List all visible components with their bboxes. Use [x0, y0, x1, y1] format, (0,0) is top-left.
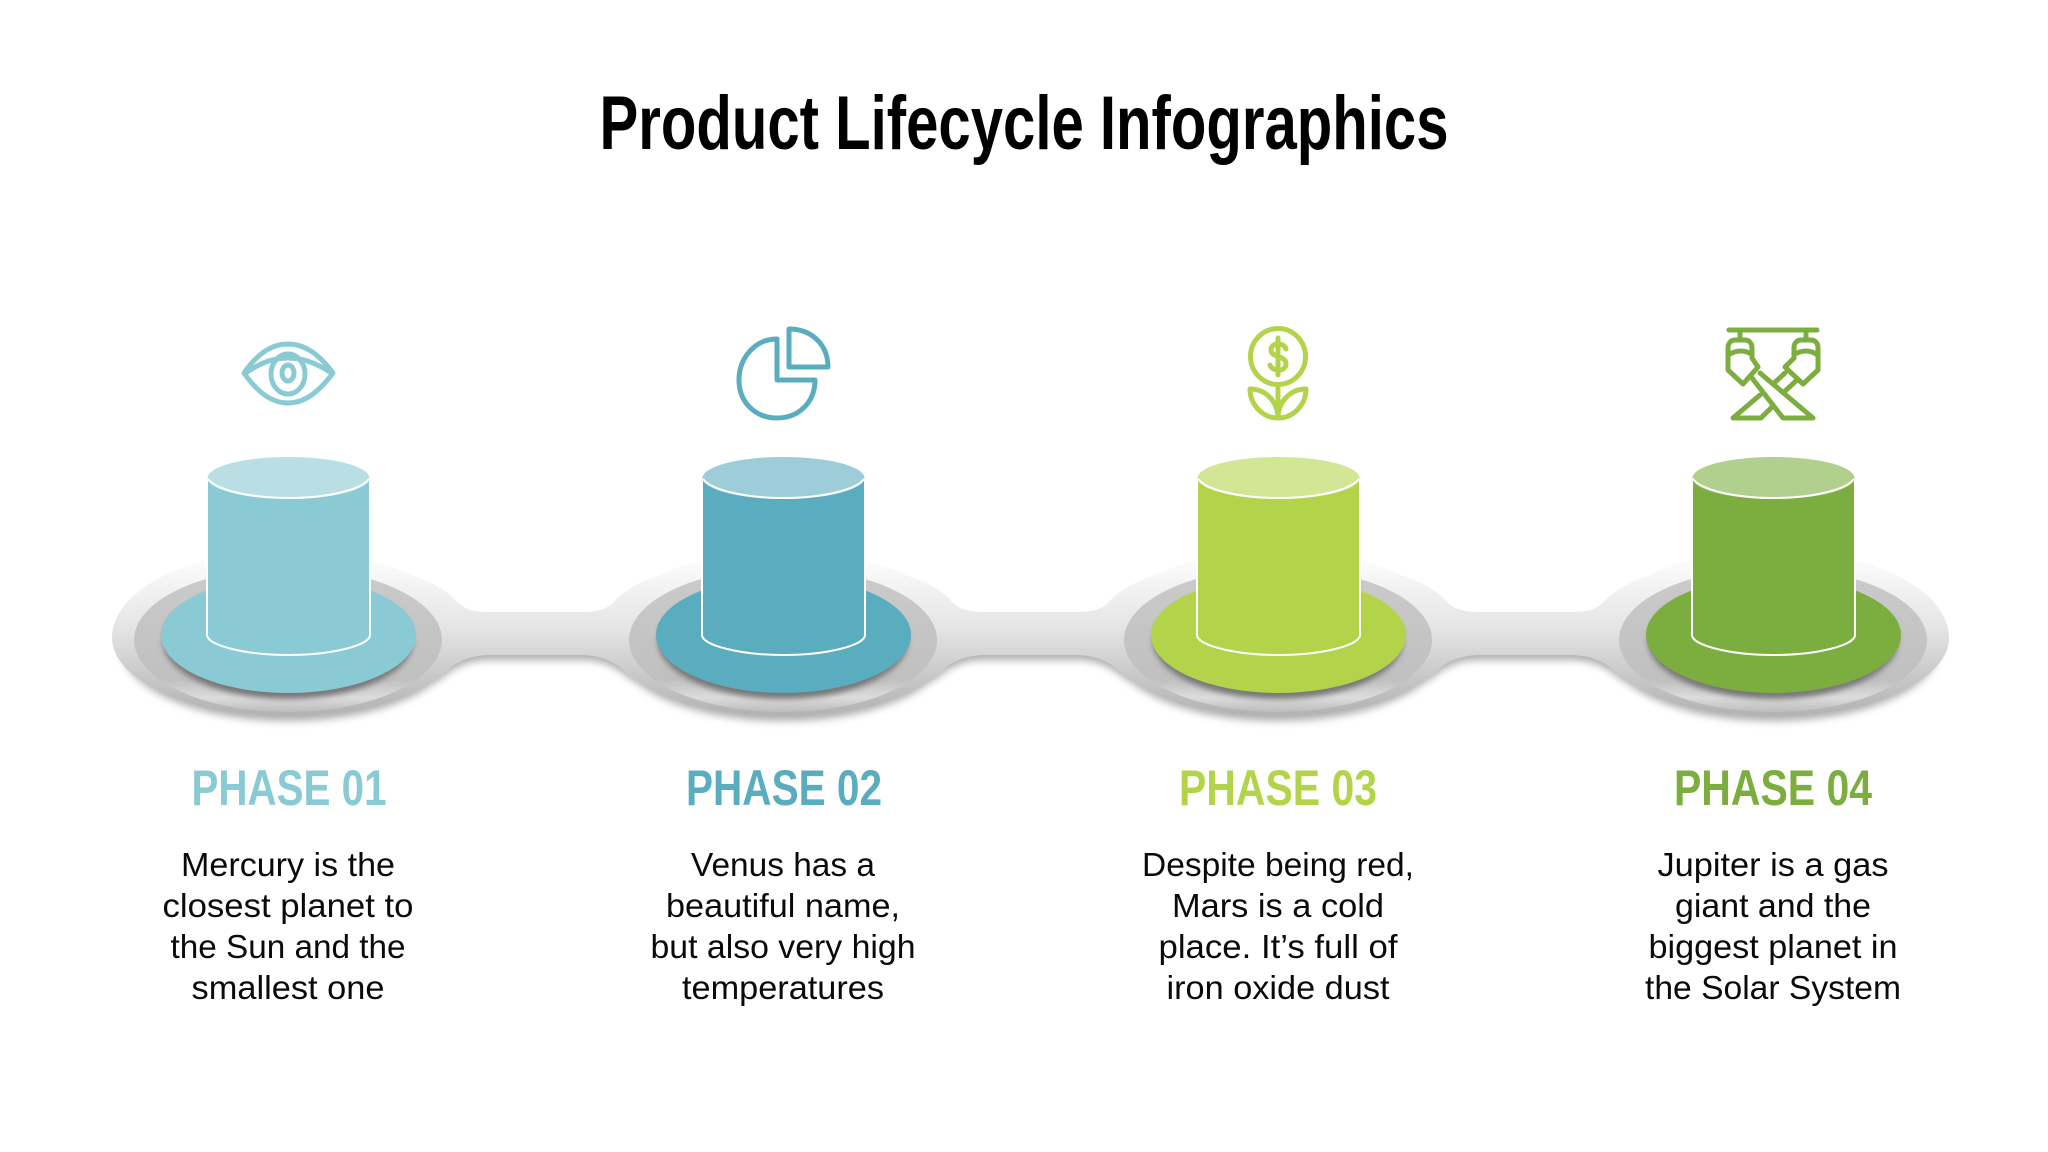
heading: phase 02: PHASE 02: [686, 760, 882, 816]
heading: phase 01: PHASE 01: [192, 760, 386, 816]
timeline track: [112, 550, 1949, 721]
text: phase 01: Mercury is the: [181, 846, 395, 883]
text: phase 04: giant and the: [1675, 887, 1871, 924]
icon: robotic arms: [1728, 330, 1818, 418]
cylinder 2: [656, 457, 911, 693]
connector 1: [402, 573, 669, 696]
heading: phase 03: PHASE 03: [1179, 760, 1377, 816]
text: phase 02: but also very high: [650, 928, 916, 965]
phase 02: [650, 329, 916, 1006]
title: Product Lifecycle Infographics: [600, 81, 1448, 166]
cylinder 3: [1151, 457, 1406, 693]
text: phase 04: [1645, 846, 1901, 1006]
heading: phase 04: PHASE 04: [1674, 760, 1872, 816]
text: phase 04: Jupiter is a gas: [1658, 846, 1888, 883]
text: phase 03: Mars is a cold: [1172, 887, 1384, 924]
text: phase 03: [1142, 846, 1414, 1006]
text: phase 03: Despite being red,: [1142, 846, 1414, 883]
text: phase 03: iron oxide dust: [1166, 969, 1390, 1006]
icon: pie chart: [739, 329, 828, 418]
cylinder 4: [1646, 457, 1901, 693]
text: phase 01: [162, 846, 414, 1006]
connector 3: [1392, 573, 1659, 696]
text: phase 02: beautiful name,: [666, 887, 900, 924]
phase 01: [161, 344, 416, 1006]
icon: money plant: [1250, 328, 1306, 418]
text: phase 02: temperatures: [682, 969, 884, 1006]
text: phase 01: the Sun and the: [170, 928, 406, 965]
phase 03: [1142, 328, 1414, 1006]
text: phase 01: closest planet to: [162, 887, 414, 924]
connector 2: [897, 573, 1164, 696]
text: phase 03: place. It’s full of: [1158, 928, 1398, 965]
icon: eye: [244, 344, 333, 403]
phase 04: [1645, 330, 1901, 1006]
text: phase 04: the Solar System: [1645, 969, 1901, 1006]
cylinder 1: [161, 457, 416, 693]
text: phase 04: biggest planet in: [1648, 928, 1898, 965]
text: phase 01: smallest one: [192, 969, 384, 1006]
text: phase 02: [650, 846, 916, 1006]
text: phase 02: Venus has a: [691, 846, 876, 883]
